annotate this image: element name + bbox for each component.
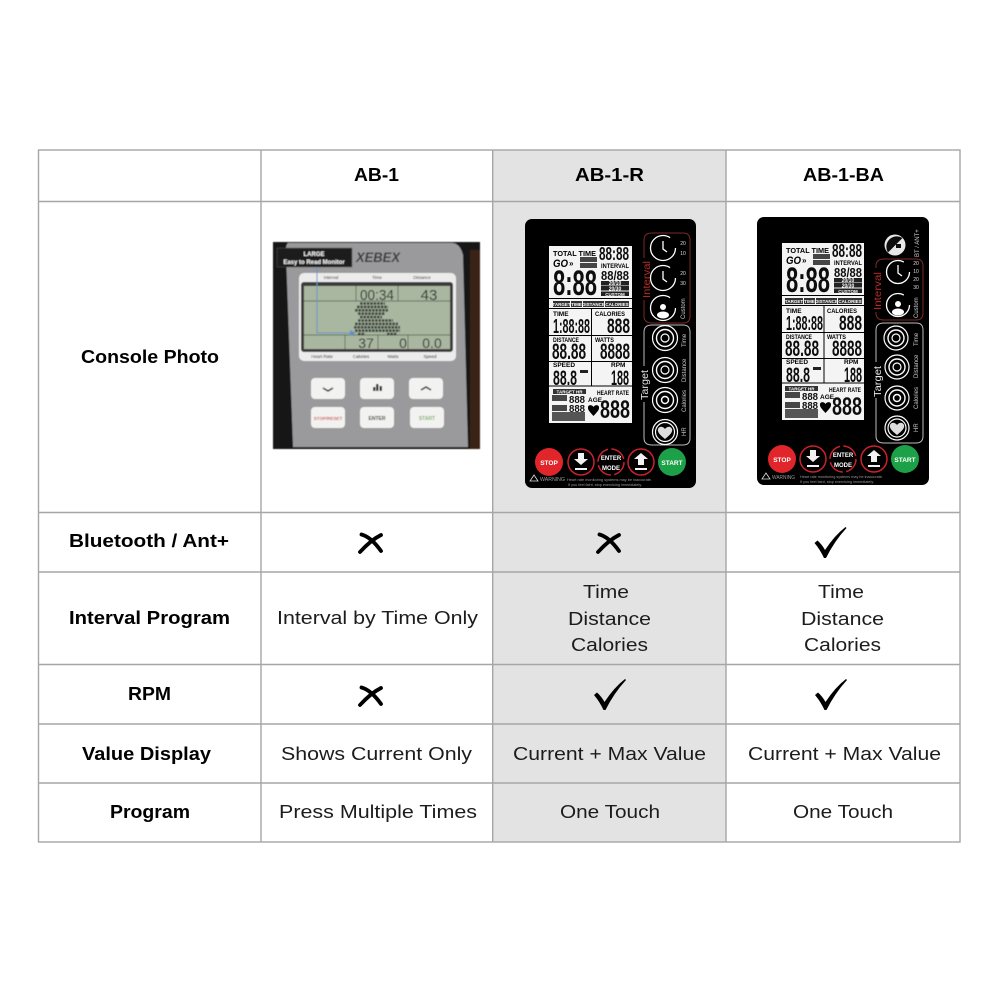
row label: Interval Program: Interval Program	[69, 607, 230, 628]
LCD display: CALORIES	[595, 311, 626, 318]
text: AB-1-R program: One Touch	[560, 801, 660, 822]
icon: check, AB-1-R RPM	[594, 679, 626, 710]
warning note: Heart rate monitoring systems may be inaccurate.	[800, 475, 883, 479]
interval button group	[872, 259, 923, 320]
LCD display: 20/30	[842, 284, 854, 290]
interval button group: 20	[913, 261, 919, 267]
interval button group: Custom	[914, 297, 920, 318]
target button group: Distance	[914, 354, 920, 378]
interval button group	[641, 233, 690, 323]
interval button group: Custom	[681, 298, 687, 319]
text: AB-1-BA interval programs	[801, 581, 884, 655]
row label: Bluetooth / Ant+: Bluetooth / Ant+	[69, 530, 229, 551]
row label: Value Display: Value Display	[82, 743, 212, 764]
LCD display: 1:88:88	[553, 316, 590, 338]
console photo: AB-1: Speed	[423, 354, 437, 359]
LCD display: 888	[832, 393, 862, 421]
column heading: AB-1: AB-1	[354, 164, 399, 185]
LCD display: 20/30	[609, 286, 621, 292]
text: AB-1-BA program: One Touch	[793, 801, 893, 822]
text: AB-1-BA value display: Current + Max Value	[748, 743, 941, 764]
target button group: Distance	[682, 358, 688, 382]
LCD display: GO	[553, 258, 568, 270]
LCD display: SPEED	[553, 362, 575, 369]
row label: Console Photo: Console Photo	[81, 346, 219, 367]
control buttons	[535, 448, 686, 476]
console photo: AB-1: 00:34	[360, 287, 394, 304]
text: AB-1-BA interval programs: Distance	[801, 608, 884, 629]
control buttons: MODE	[602, 466, 620, 472]
console photo: AB-1: 37	[358, 335, 374, 351]
interval button group: 20	[680, 241, 686, 247]
console photo: AB-1: Time	[372, 275, 382, 280]
LCD display: 88.8	[553, 367, 577, 390]
target button group: Target	[872, 366, 884, 397]
LCD display: CALORIES	[838, 299, 862, 304]
LCD display: RPM	[611, 362, 625, 369]
control buttons: ENTER	[833, 453, 854, 459]
LCD display	[782, 241, 864, 421]
console panel: AB-1-BA	[757, 217, 929, 485]
LCD display: 20/10	[609, 281, 621, 287]
LCD display: HEART RATE	[829, 387, 862, 394]
LCD display: CUSTOM	[605, 292, 625, 297]
column heading: AB-1-R: AB-1-R	[575, 164, 644, 185]
dot matrix chart	[354, 304, 400, 334]
LCD display: 1:88:88	[786, 313, 823, 335]
console photo: AB-1: Watts	[387, 354, 399, 359]
brand logo: XEBEX	[355, 249, 402, 265]
LCD display: GO	[786, 255, 801, 267]
LCD display: 8:88	[553, 264, 597, 303]
console photo: AB-1	[273, 242, 480, 449]
text: AB-1-R interval programs: Time	[583, 581, 629, 602]
LCD display: 888	[569, 395, 585, 406]
highlighted column: AB-1-R	[493, 150, 726, 842]
LCD display: DISTANCE	[815, 299, 838, 304]
interval button group: 30	[680, 281, 686, 287]
LCD display: WATTS	[827, 334, 847, 341]
icon: heart	[820, 402, 831, 413]
target button group: Calories	[914, 387, 920, 409]
warning note	[530, 475, 652, 487]
control buttons: ENTER	[601, 456, 622, 462]
LCD display: CALORIES	[827, 308, 858, 315]
LCD display: DISTANCE	[553, 337, 580, 344]
target button group: HR	[682, 427, 688, 436]
warning note: WARNING	[540, 477, 565, 483]
LCD display	[549, 244, 632, 424]
LCD display: 888	[802, 392, 818, 403]
icon: bluetooth / ANT+ button	[884, 229, 921, 257]
LCD display: 88.88	[552, 339, 586, 364]
warning note: If you feel faint, stop exercising immediately.	[568, 483, 642, 487]
LCD display: INTERVAL	[834, 260, 862, 267]
LCD display: 8888	[832, 336, 862, 361]
console photo: AB-1: 0	[399, 335, 407, 351]
icon: cross, AB-1-R Bluetooth	[598, 534, 619, 552]
target button group: Time	[682, 333, 688, 347]
interval button group: Interval	[641, 261, 653, 298]
target button group	[639, 325, 690, 445]
LCD display: DISTANCE	[786, 334, 813, 341]
LCD display: CALORIES	[605, 302, 629, 307]
icon: heart	[588, 405, 599, 416]
LCD display: HEART RATE	[597, 390, 630, 397]
icon: cross, AB-1 RPM	[360, 688, 381, 705]
icon: bluetooth / ANT+ button: BT / ANT+	[915, 229, 921, 257]
LCD display: TOTAL TIME	[553, 249, 596, 258]
console buttons: START	[419, 416, 435, 422]
text: AB-1-R interval programs: Distance	[568, 608, 651, 629]
LCD display: 88:88	[599, 244, 629, 264]
control buttons: START	[661, 460, 683, 467]
console photo: AB-1: Distance	[413, 275, 431, 280]
LCD display: INTERVAL	[601, 263, 629, 270]
control buttons	[768, 445, 919, 473]
column heading: AB-1-BA: AB-1-BA	[803, 164, 884, 185]
LCD display: RPM	[844, 359, 858, 366]
monitor label	[277, 248, 352, 267]
LCD display: TARGET	[552, 302, 571, 307]
LCD display: 88.8	[786, 364, 810, 387]
console buttons: ENTER	[369, 416, 386, 422]
icon: check, AB-1-BA RPM	[815, 679, 847, 710]
icon: check, AB-1-BA Bluetooth	[814, 527, 846, 558]
warning note: If you feel faint, stop exercising immediately.	[800, 480, 874, 484]
LCD display: 8:88	[786, 261, 830, 300]
LCD display: DISTANCE	[582, 302, 605, 307]
console buttons: STOP/RESET	[314, 416, 342, 421]
LCD display: 20/10	[842, 278, 854, 284]
control buttons: START	[894, 457, 916, 464]
LCD display: TARGET HR	[557, 390, 583, 394]
LCD display: TARGET	[785, 299, 803, 304]
interval button group: Interval	[872, 272, 884, 310]
LCD display: TOTAL TIME	[786, 246, 829, 255]
LCD display: »	[802, 256, 807, 265]
text: AB-1-R value display: Current + Max Value	[513, 743, 706, 764]
icon: cross, AB-1 Bluetooth	[360, 534, 381, 552]
LCD display: 88/88	[834, 265, 862, 280]
text: Interval by Time Only: Interval by Time Only	[277, 607, 479, 628]
interval button group: 20	[913, 277, 919, 283]
text: Shows Current Only: Shows Current Only	[281, 743, 473, 764]
LCD display: 88/88	[601, 268, 629, 283]
warning note	[762, 473, 883, 484]
LCD display: AGE	[820, 394, 835, 401]
text: AB-1-R interval programs	[568, 581, 651, 655]
monitor label: Easy to Read Monitor	[283, 260, 345, 266]
LCD display: 188	[611, 367, 629, 390]
LCD display: 888	[569, 404, 585, 415]
LCD display: 888	[802, 401, 818, 412]
target button group: HR	[914, 423, 920, 432]
target button group: Calories	[682, 390, 688, 412]
LCD display: 8888	[600, 339, 630, 364]
LCD display: 188	[844, 364, 862, 387]
text: AB-1-BA interval programs: Time	[818, 581, 864, 602]
warning note: WARNING	[772, 475, 795, 481]
console photo: AB-1: Heart Rate	[311, 354, 333, 359]
console buttons	[311, 378, 444, 428]
monitor bezel	[299, 273, 456, 361]
table grid	[38, 150, 960, 842]
text: AB-1-BA interval programs: Calories	[804, 634, 881, 655]
LCD display: 888	[600, 396, 630, 424]
console photo: AB-1: Interval	[324, 275, 338, 280]
text: Press Multiple Times: Press Multiple Times	[279, 801, 477, 822]
LCD display: 88:88	[832, 241, 862, 261]
row label: Program: Program	[110, 801, 190, 822]
LCD display: TIME	[786, 308, 802, 315]
LCD display: 888	[839, 312, 862, 335]
LCD display: CUSTOM	[838, 289, 858, 294]
LCD display: »	[569, 259, 574, 268]
control buttons: STOP	[773, 457, 791, 464]
interval button group: 10	[680, 251, 686, 257]
LCD display: 888	[607, 315, 630, 338]
LCD display: TIME	[571, 302, 582, 307]
text: AB-1-R interval programs: Calories	[571, 634, 648, 655]
LCD display: TIME	[553, 311, 569, 318]
row label: RPM: RPM	[128, 683, 171, 704]
LCD display: AGE	[588, 397, 603, 404]
console photo: AB-1: 0.0	[422, 335, 442, 351]
control buttons: MODE	[834, 463, 852, 469]
control buttons: STOP	[540, 460, 558, 467]
console panel: AB-1-R	[525, 219, 696, 488]
LCD display: WATTS	[595, 337, 615, 344]
target button group: Time	[914, 332, 920, 346]
console photo: AB-1: 43	[421, 287, 437, 304]
target button group	[872, 323, 923, 443]
target button group: Target	[639, 370, 651, 400]
LCD display: TIME	[804, 299, 815, 304]
LCD display: SPEED	[786, 359, 808, 366]
LCD display: TARGET HR	[789, 386, 815, 392]
monitor label: LARGE	[304, 252, 324, 258]
LCD display: 88.88	[785, 336, 819, 361]
interval button group: 20	[680, 271, 686, 277]
LCD screen	[301, 282, 453, 352]
console photo: AB-1: Calories	[353, 354, 370, 359]
interval button group: 30	[913, 285, 919, 291]
interval button group: 10	[913, 269, 919, 275]
warning note: Heart rate monitoring systems may be inaccurate.	[567, 478, 652, 482]
